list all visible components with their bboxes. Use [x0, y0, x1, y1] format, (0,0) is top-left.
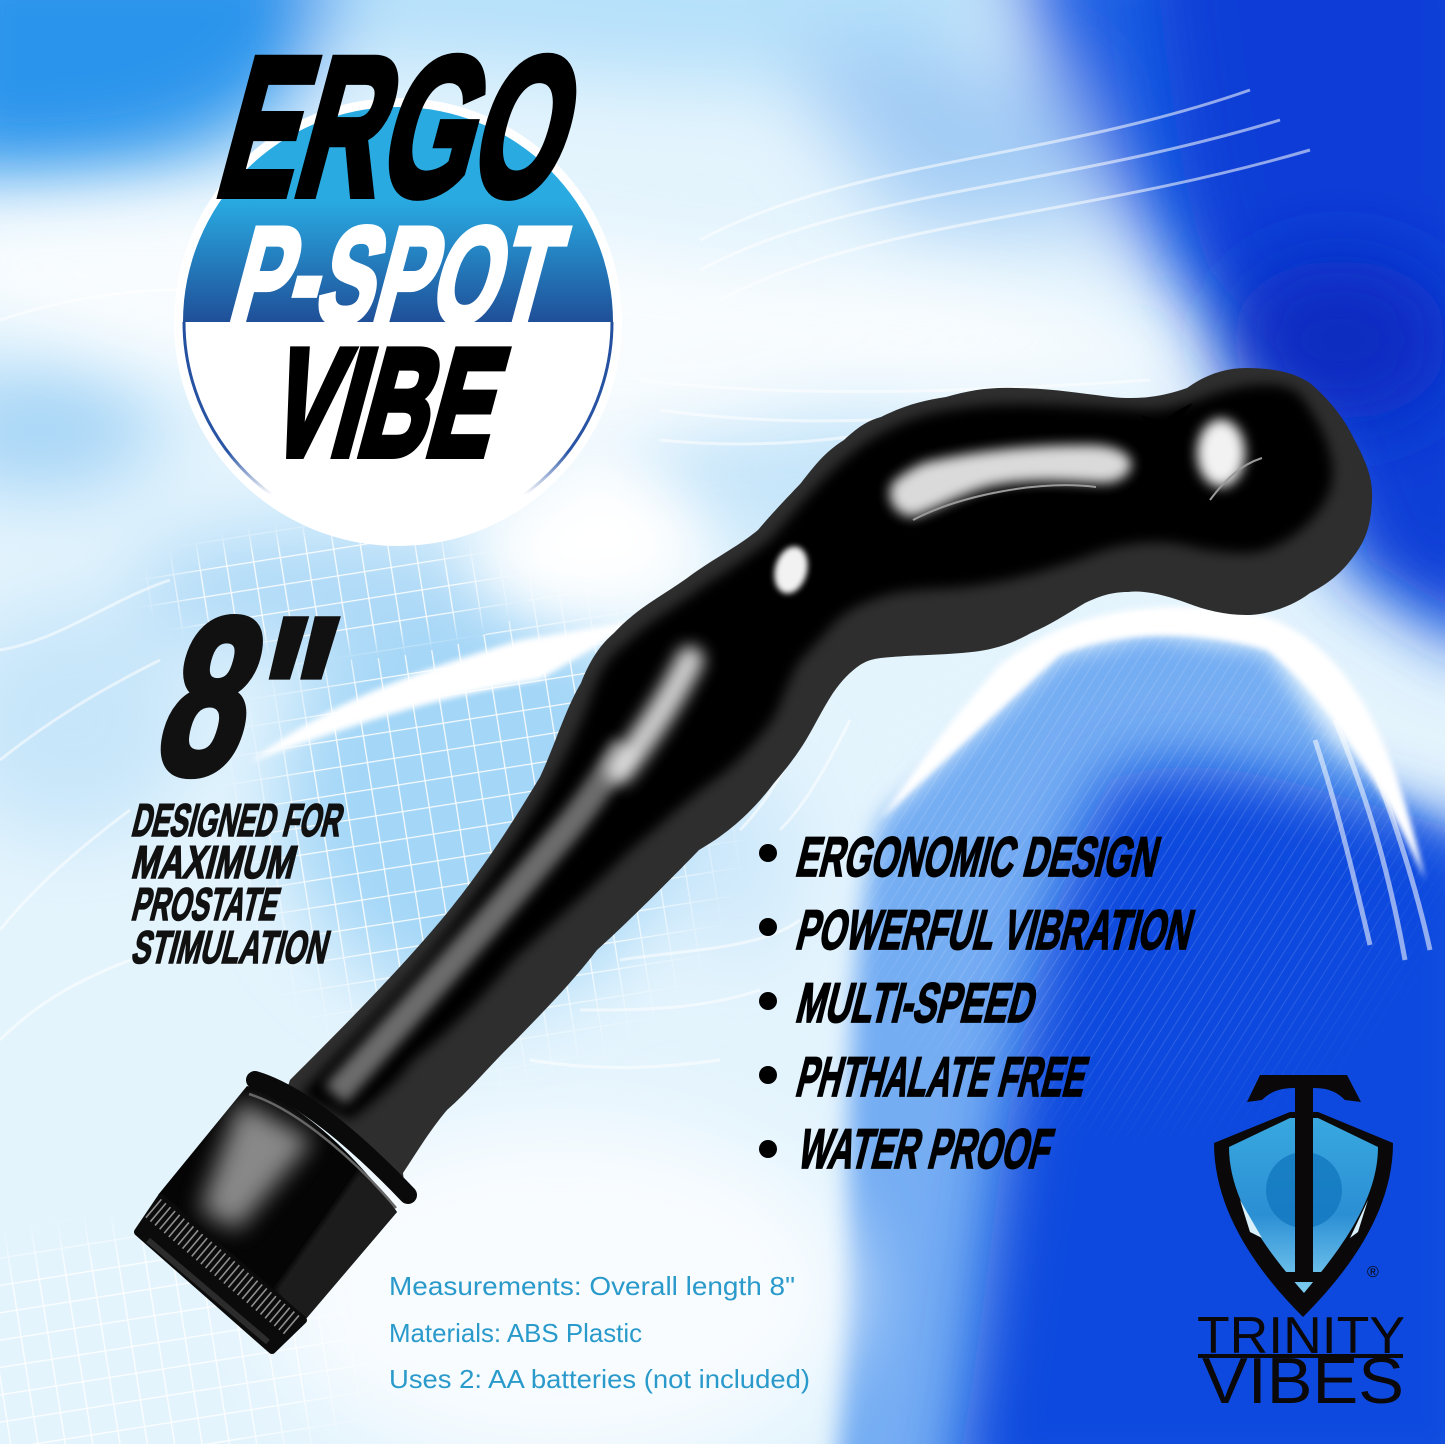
feature labels: MULTI-SPEED — [791, 973, 1043, 1035]
title: VIBE: VIBE — [255, 317, 523, 487]
tagline text block: STIMULATION — [128, 922, 335, 973]
logo wordmark: VIBES — [1202, 1344, 1404, 1417]
feature labels — [791, 827, 1200, 1181]
specifications text block: Measurements: Overall length 8" — [389, 1271, 795, 1301]
tagline text block — [128, 795, 349, 973]
specifications text block: Materials: ABS Plastic — [389, 1318, 642, 1348]
specifications text block: Uses 2: AA batteries (not included) — [389, 1364, 810, 1394]
tagline text block: DESIGNED FOR — [128, 795, 349, 846]
product illustration — [138, 368, 1372, 1350]
icon: shield — [1214, 1112, 1393, 1317]
logo wordmark: TRINITY — [1197, 1307, 1405, 1365]
tagline text block: MAXIMUM — [128, 837, 302, 888]
feature labels: WATER PROOF — [793, 1119, 1059, 1181]
length callout: 8 inches: 8" — [137, 572, 360, 820]
registered mark: ® — [1367, 1264, 1379, 1281]
product cap — [138, 1080, 410, 1350]
title: ERGO: ERGO — [201, 16, 603, 237]
specifications text block — [389, 1271, 810, 1394]
feature labels: PHTHALATE FREE — [791, 1047, 1094, 1109]
feature labels: POWERFUL VIBRATION — [791, 900, 1200, 962]
title badge circle — [174, 98, 622, 546]
title: P-SPOT: P-SPOT — [218, 200, 579, 351]
bullets — [759, 844, 777, 1158]
feature labels: ERGONOMIC DESIGN — [791, 827, 1166, 889]
icon: T letterform — [1247, 1075, 1361, 1282]
logo: Trinity Vibes — [1197, 1075, 1405, 1417]
feature list — [759, 827, 1200, 1181]
tagline text block: PROSTATE — [128, 879, 285, 930]
logo wordmark — [1197, 1307, 1405, 1417]
